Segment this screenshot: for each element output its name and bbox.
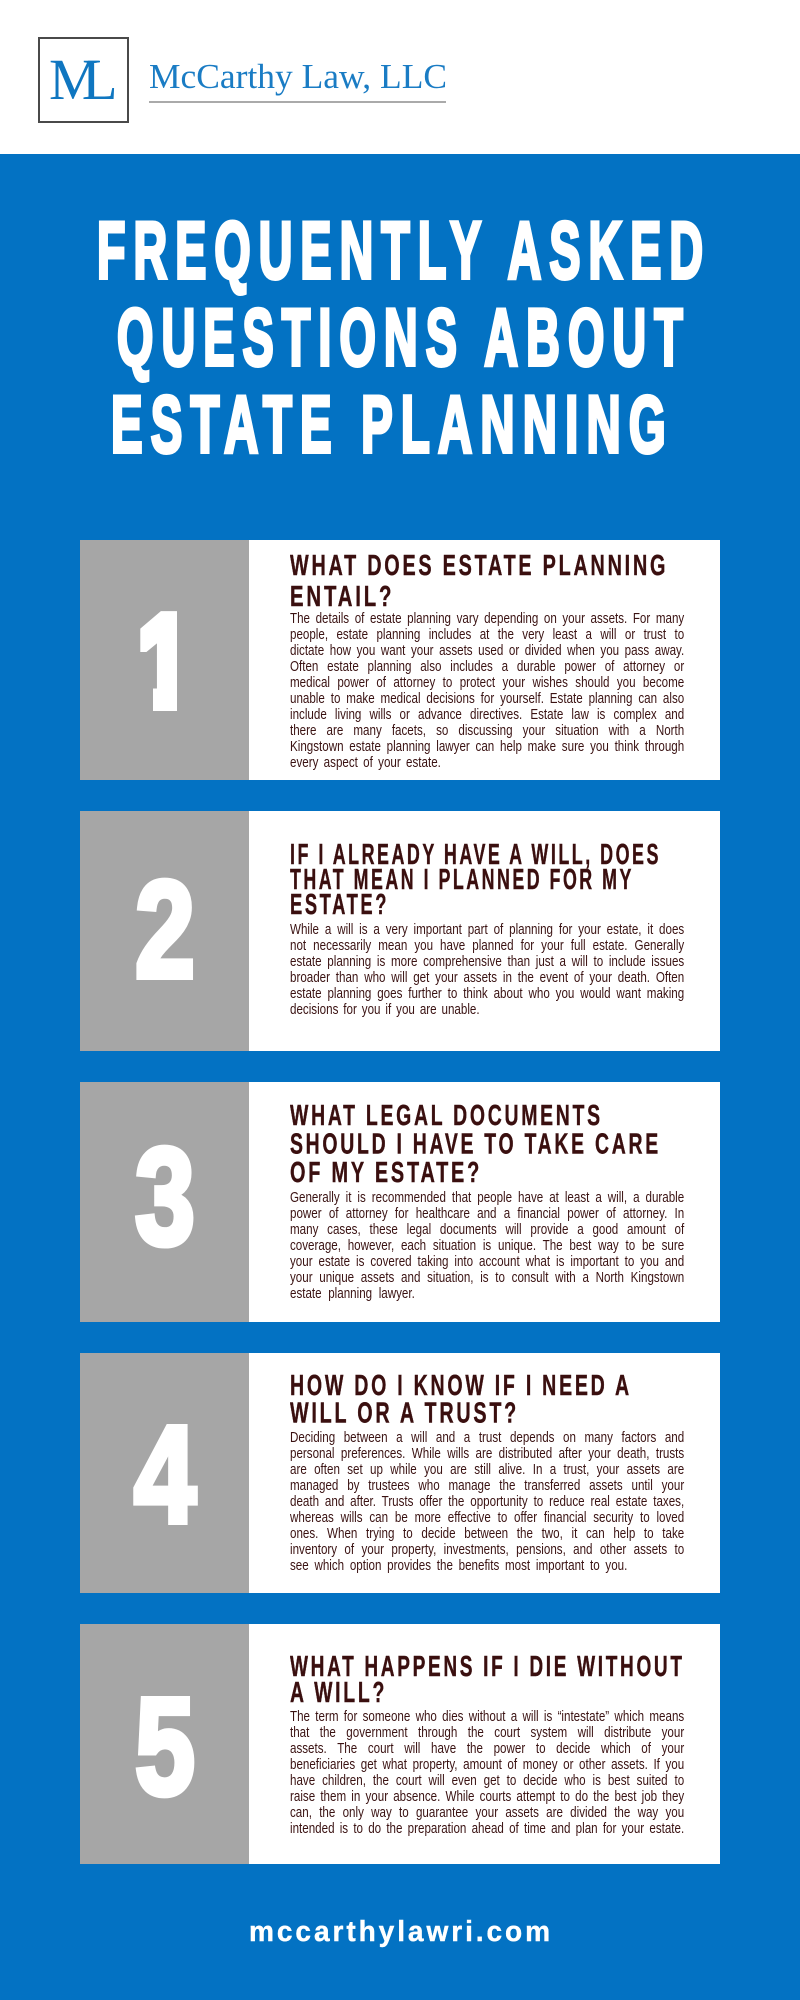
number 1: 1: [138, 589, 194, 736]
body text: estate planning is more comprehensive than just a will to include issues: [290, 954, 684, 970]
body text: Often estate planning also includes a durable power of attorney or: [290, 659, 684, 675]
body text: raise them in your absence. While courts attempt to do the best job they: [290, 1789, 684, 1805]
heading: [290, 553, 668, 613]
number 5: [80, 1624, 249, 1864]
body text: personal preferences. While wills are distributed after your death, trusts: [290, 1446, 684, 1462]
body text: your unique assets and situation, is to consult with a North Kingstown: [290, 1270, 684, 1286]
body text: see which option provides the benefits most important to you.: [290, 1558, 627, 1574]
body text: coverage, however, each situation is unique. The best way to be sure: [290, 1238, 684, 1254]
header band: [0, 0, 800, 154]
panel: question 2: [80, 811, 720, 1051]
body text: unable to make medical decisions for yourself. Estate planning can also: [290, 691, 684, 707]
title: [97, 204, 711, 469]
heading: SHOULD I HAVE TO TAKE CARE: [290, 1129, 661, 1161]
heading: A WILL?: [290, 1677, 387, 1709]
body text: can, the only way to guarantee your assets are divided the way you: [290, 1805, 684, 1821]
logo box with monogram: [39, 38, 128, 122]
body text: [290, 1709, 684, 1837]
body text: Kingstown estate planning lawyer can help make sure you think through: [290, 739, 684, 755]
number 4: 4: [134, 1398, 196, 1552]
body text: inventory of your property, investments, pensions, and other assets to: [290, 1542, 684, 1558]
body text: estate planning lawyer.: [290, 1286, 415, 1302]
number 5: 5: [135, 1670, 195, 1824]
body text: people, estate planning includes at the very least a will or trust to: [290, 627, 684, 643]
body text: have children, the court will even get to decide who is best suited to: [290, 1773, 684, 1789]
title: QUESTIONS ABOUT: [117, 291, 691, 382]
number 2: [80, 811, 249, 1051]
number 3: 3: [135, 1120, 195, 1274]
body text: decisions for you if you are unable.: [290, 1002, 480, 1018]
panel: question 3: [80, 1082, 720, 1322]
body text: [290, 1190, 684, 1302]
title: FREQUENTLY ASKED: [97, 204, 711, 295]
body text: dictate how you want your assets used or divided when you pass away.: [290, 643, 684, 659]
body text: your estate is covered taking into account what is important to you and: [290, 1254, 684, 1270]
logo: [38, 37, 447, 123]
panel: question 1: [80, 540, 720, 780]
heading: ENTAIL?: [290, 581, 394, 613]
logo wordmark: McCarthy Law, LLC: [149, 57, 447, 96]
body text: While a will is a very important part of planning for your estate, it does: [290, 922, 684, 938]
body text: assets. The court will have the power to decide which of your: [290, 1741, 684, 1757]
heading: [290, 1373, 632, 1429]
body text: Deciding between a will and a trust depends on many factors and: [290, 1430, 684, 1446]
footer website: mccarthylawri.com: [249, 1916, 553, 1948]
body text: [290, 1430, 684, 1574]
number 4: [80, 1353, 249, 1593]
body text: every aspect of your estate.: [290, 755, 441, 771]
body text: are often set up while you are still alive. In a trust, your assets are: [290, 1462, 684, 1478]
body text: include living wills or advance directives. Estate law is complex and: [290, 707, 684, 723]
logo box with monogram: ML: [49, 47, 114, 112]
panel: question 4: [80, 1353, 720, 1593]
body text: [290, 611, 684, 771]
body text: power of attorney for healthcare and a financial power of attorney. In: [290, 1206, 684, 1222]
body text: The details of estate planning vary depending on your assets. For many: [290, 611, 684, 627]
title: ESTATE PLANNING: [111, 378, 674, 469]
body text: estate planning goes further to think about who you would want making: [290, 986, 684, 1002]
body text: medical power of attorney to protect your wishes should you become: [290, 675, 684, 691]
heading: [290, 1654, 685, 1709]
body text: whereas wills can be more effective to offer financial security to loved: [290, 1510, 684, 1526]
body text: broader than who will get your assets in the event of your death. Often: [290, 970, 684, 986]
number 2: 2: [135, 853, 195, 1007]
number 3: [80, 1082, 249, 1322]
heading: [290, 842, 661, 920]
heading: [290, 1103, 661, 1189]
body text: that the government through the court system will distribute your: [290, 1725, 684, 1741]
body text: ones. When trying to decide between the two, it can help to take: [290, 1526, 684, 1542]
body text: death and after. Trusts offer the opportunity to reduce real estate taxes,: [290, 1494, 684, 1510]
body text: The term for someone who dies without a will is “intestate” which means: [290, 1709, 684, 1725]
body text: Generally it is recommended that people have at least a will, a durable: [290, 1190, 684, 1206]
body text: not necessarily mean you have planned for your full estate. Generally: [290, 938, 684, 954]
number 1: [80, 540, 249, 780]
body text: beneficiaries get what property, amount of money or other assets. If you: [290, 1757, 684, 1773]
body text: intended is to do the preparation ahead of time and plan for your estate.: [290, 1821, 684, 1837]
heading: WILL OR A TRUST?: [290, 1398, 519, 1429]
body text: managed by trustees who manage the transferred assets until your: [290, 1478, 684, 1494]
heading: OF MY ESTATE?: [290, 1157, 482, 1189]
body text: many cases, these legal documents will provide a good amount of: [290, 1222, 684, 1238]
heading: THAT MEAN I PLANNED FOR MY: [290, 864, 634, 896]
body text: [290, 922, 684, 1018]
panel: question 5: [80, 1624, 720, 1864]
body text: there are many facets, so discussing your situation with a North: [290, 723, 684, 739]
